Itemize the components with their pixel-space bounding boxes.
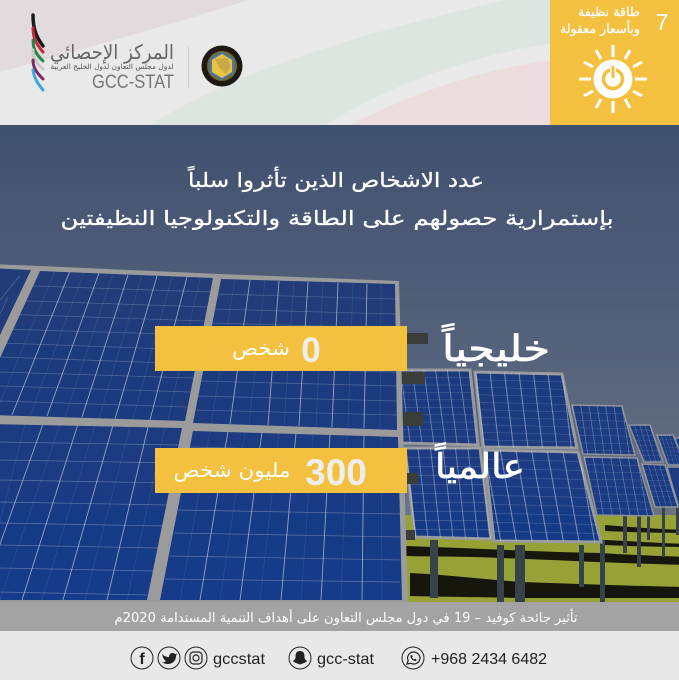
- handle: gccstat: gccstat: [213, 651, 266, 668]
- icon: GCC emblem: [202, 46, 242, 86]
- logo Arabic name: المركز الإحصائي: [50, 40, 174, 65]
- sky: [0, 125, 679, 602]
- foreground solar array: [0, 268, 402, 600]
- icon: facebook: f: [139, 651, 145, 668]
- logo ribbon: [33, 15, 43, 90]
- distant solar arrays: [572, 405, 679, 516]
- goal title: طاقة نظيفة: [578, 4, 640, 19]
- logo GCC-STAT wordmark: GCC-STAT: [92, 71, 174, 93]
- foreground frame: [0, 264, 408, 610]
- icon: twitter: [158, 647, 180, 669]
- title line 1: عدد الاشخاص الذين تأثروا سلباً: [188, 166, 484, 192]
- source text: تأثير جائحة كوفيد – 19 في دول مجلس التعاون على أهداف التنمية المستدامة 2020م: [114, 608, 578, 626]
- panel: SDG 7 goal tile: [550, 0, 679, 125]
- header background: [0, 0, 679, 125]
- logo subtitle: لدول مجلس التعاون لدول الخليج العربية: [50, 62, 174, 71]
- grass with shadows and posts: [405, 505, 679, 610]
- goal number: 7: [656, 9, 668, 35]
- handle: gcc-stat: gcc-stat: [317, 651, 375, 668]
- source strip: [0, 602, 679, 631]
- logo: GCC-STAT: [33, 15, 242, 93]
- middle solar array: [400, 370, 601, 542]
- stat: Gulf: [155, 323, 550, 371]
- goal title: وبأسعار معقولة: [560, 20, 640, 37]
- title line 2: بإستمرارية حصولهم على الطاقة والتكنولوجيا النظيفتين: [60, 206, 614, 231]
- stat value: 0: [301, 331, 321, 370]
- stat bar: [155, 448, 407, 493]
- panel connectors: [400, 333, 428, 540]
- photo: solar panels: [0, 264, 679, 610]
- stat unit: شخص: [232, 336, 290, 360]
- stat unit: مليون شخص: [174, 458, 290, 482]
- region label: عالمياً: [434, 442, 525, 487]
- stat bar: [155, 326, 407, 371]
- stat value: 300: [305, 452, 367, 493]
- icon: sun with power symbol: [579, 45, 647, 113]
- icon: whatsapp: [402, 647, 424, 669]
- phone number: +968 2434 6482: [431, 651, 547, 668]
- stat: World: [155, 442, 525, 493]
- title: [60, 166, 614, 231]
- icon: facebook: [131, 647, 153, 669]
- icon: instagram: [185, 647, 207, 669]
- icon: snapchat: [289, 647, 311, 669]
- region label: خليجياً: [441, 323, 550, 370]
- contact footer: [0, 631, 679, 680]
- goal title: [560, 4, 640, 37]
